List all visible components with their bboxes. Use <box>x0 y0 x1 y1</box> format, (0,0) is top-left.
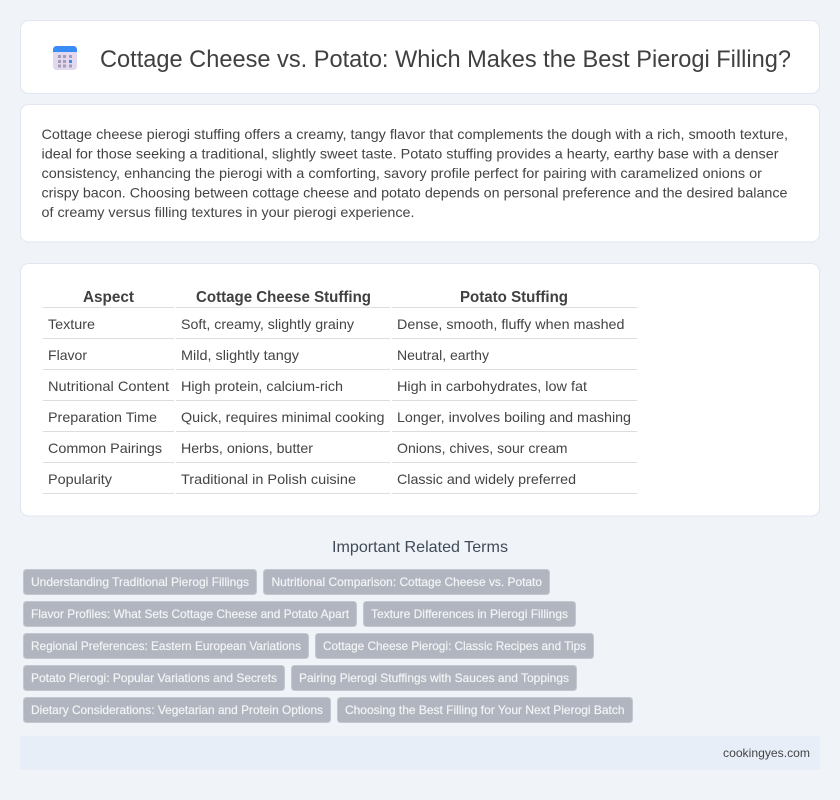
paragraph text: consistency, enhancing the pierogi with a comforting, savory profile perfect for pairing with caramelized onions or <box>42 165 762 181</box>
row: popularity: Traditional in Polish cuisine <box>181 471 356 487</box>
related term tags <box>24 570 632 722</box>
row: nutritional content: High protein, calcium-rich <box>181 378 343 394</box>
row: popularity <box>48 471 576 487</box>
row: common pairings: Onions, chives, sour cream <box>397 440 568 456</box>
tag: cottage cheese recipes <box>316 634 594 658</box>
row: nutritional content <box>48 378 587 394</box>
tag: potato pierogi: Potato Pierogi: Popular Variations and Secrets <box>31 671 277 685</box>
footer source text: cookingyes.com <box>723 746 810 760</box>
tag: pairing sauces: Pairing Pierogi Stuffings with Sauces and Toppings <box>299 671 569 685</box>
row: preparation time: Quick, requires minimal cooking <box>181 409 384 425</box>
row: flavor: Mild, slightly tangy <box>181 347 299 363</box>
row: popularity: Classic and widely preferred <box>397 471 576 487</box>
row: texture: Texture <box>48 316 95 332</box>
paragraph text: Cottage cheese pierogi stuffing offers a creamy, tangy flavor that complements the dough with a rich, smooth texture, <box>42 126 788 142</box>
tag: potato pierogi <box>24 666 284 690</box>
row: preparation time: Longer, involves boiling and mashing <box>397 409 631 425</box>
tag: choosing best filling: Choosing the Best Filling for Your Next Pierogi Batch <box>345 703 624 717</box>
title: Cottage Cheese vs. Potato: Which Makes the Best Pierogi Filling? <box>100 46 791 73</box>
row: common pairings <box>48 440 568 456</box>
tag: flavor profiles <box>24 602 356 626</box>
tag: regional preferences: Regional Preferences: Eastern European Variations <box>31 639 301 653</box>
row: texture: Soft, creamy, slightly grainy <box>181 316 354 332</box>
row: nutritional content: High in carbohydrates, low fat <box>397 378 587 394</box>
panel: comparison table <box>20 264 820 516</box>
tag: dietary considerations: Dietary Considerations: Vegetarian and Protein Options <box>31 703 323 717</box>
tag: traditional fillings: Understanding Traditional Pierogi Fillings <box>31 575 249 589</box>
tag: nutritional comparison <box>264 570 550 594</box>
paragraph text: of creamy versus filling textures in your pierogi experience. <box>42 204 414 220</box>
row: preparation time: Preparation Time <box>48 409 157 425</box>
table header row: Potato Stuffing <box>460 289 568 306</box>
row: popularity: Popularity <box>48 471 112 487</box>
row: flavor: Neutral, earthy <box>397 347 489 363</box>
tag: choosing best filling <box>338 698 632 722</box>
row: preparation time <box>48 409 631 425</box>
tag: traditional fillings <box>24 570 256 594</box>
heading: important related terms: Important Related Terms <box>332 539 508 556</box>
row: common pairings: Herbs, onions, butter <box>181 440 313 456</box>
row: texture: Dense, smooth, fluffy when mashed <box>397 316 624 332</box>
table header row: Cottage Cheese Stuffing <box>196 289 371 306</box>
tag: dietary considerations <box>24 698 330 722</box>
paragraph text: ideal for those seeking a traditional, slightly sweet taste. Potato stuffing provides a hearty, earthy base with a denser <box>42 146 779 162</box>
tag: nutritional comparison: Nutritional Comparison: Cottage Cheese vs. Potato <box>272 575 542 589</box>
row: common pairings: Common Pairings <box>48 440 162 456</box>
icon: calendar grid <box>53 46 77 70</box>
tag: pairing sauces <box>292 666 576 690</box>
footer bar <box>20 736 820 770</box>
tag: regional preferences <box>24 634 308 658</box>
row: flavor: Flavor <box>48 347 87 363</box>
panel: introduction paragraph <box>20 104 820 242</box>
table header row <box>83 289 568 306</box>
table grid lines <box>43 308 637 494</box>
tag: cottage cheese recipes: Cottage Cheese Pierogi: Classic Recipes and Tips <box>323 639 586 653</box>
tag: texture differences: Texture Differences in Pierogi Fillings <box>371 607 568 621</box>
row: nutritional content: Nutritional Content <box>48 378 169 394</box>
header panel <box>20 20 820 94</box>
tag: flavor profiles: Flavor Profiles: What Sets Cottage Cheese and Potato Apart <box>31 607 350 621</box>
tag: texture differences <box>364 602 576 626</box>
paragraph text: crispy bacon. Choosing between cottage cheese and potato depends on personal preference and the desired balance <box>42 184 788 200</box>
row: texture <box>48 316 624 332</box>
paragraph text <box>42 126 788 220</box>
table header row: Aspect <box>83 289 135 306</box>
row: flavor <box>48 347 489 363</box>
